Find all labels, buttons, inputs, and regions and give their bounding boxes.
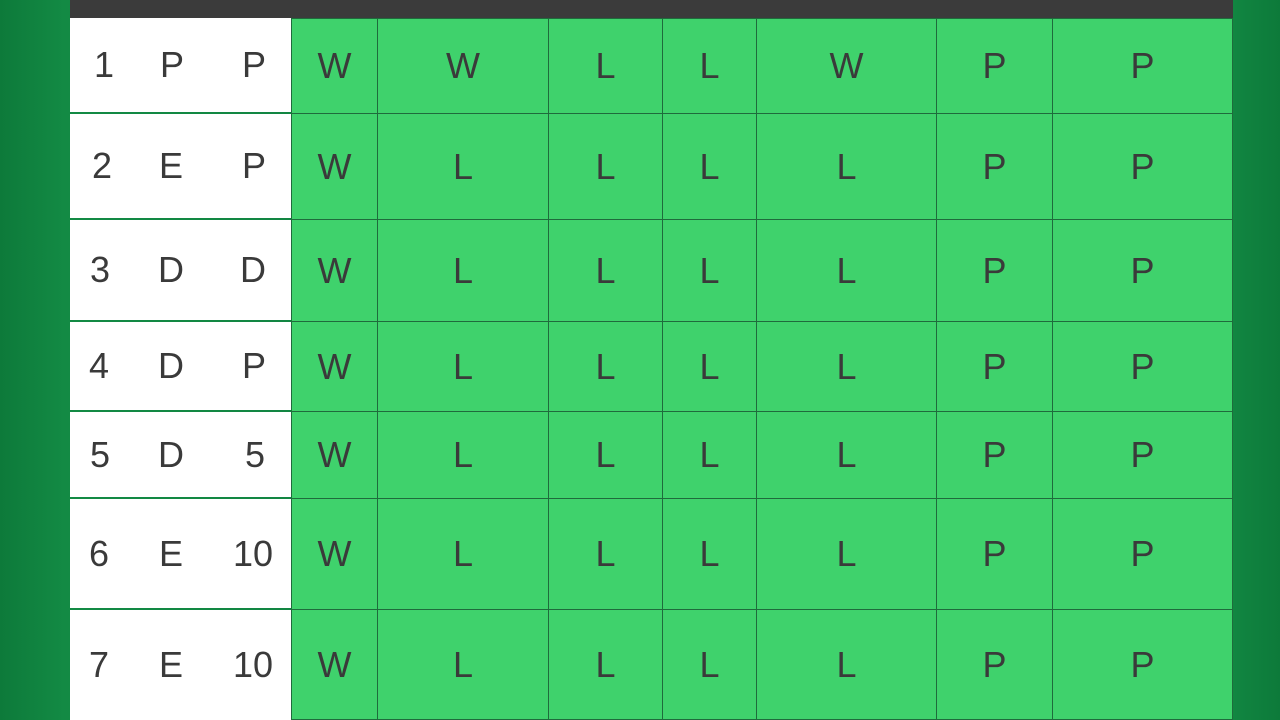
row 1: 1 — [94, 44, 114, 85]
row 5: 5 — [90, 434, 110, 474]
table: P — [982, 644, 1006, 684]
row 4 — [70, 322, 291, 410]
table: P — [982, 434, 1006, 475]
table: L — [836, 146, 857, 186]
row 1 — [70, 18, 291, 112]
row 7 — [70, 610, 291, 720]
table: L — [453, 434, 473, 475]
row 3: D — [240, 249, 266, 290]
table: P — [982, 146, 1006, 186]
row 1: P — [242, 44, 266, 85]
row 5: 5 — [245, 434, 265, 474]
table: P — [982, 250, 1006, 290]
table: L — [453, 146, 473, 186]
table: P — [1130, 250, 1154, 290]
row 6: 6 — [89, 532, 109, 574]
table: P — [982, 45, 1006, 86]
table: P — [1130, 45, 1154, 86]
table: L — [595, 250, 616, 290]
table: L — [699, 346, 720, 386]
row 6: E — [159, 532, 183, 574]
table: L — [699, 644, 720, 684]
table: L — [836, 346, 857, 386]
table: L — [453, 250, 473, 290]
row 6 — [70, 499, 291, 608]
row 7: 7 — [89, 644, 109, 685]
table: L — [836, 533, 857, 574]
table: L — [699, 45, 720, 86]
header bar — [70, 0, 1233, 18]
table: L — [595, 346, 616, 386]
table: L — [699, 250, 720, 290]
table: L — [595, 434, 616, 475]
table: W — [318, 250, 351, 290]
row 7: 10 — [233, 644, 273, 685]
row 7: E — [159, 644, 183, 685]
table: L — [595, 146, 616, 186]
row 2: 2 — [92, 145, 112, 186]
row 3: 3 — [90, 249, 110, 290]
table: W — [318, 346, 351, 386]
table: L — [595, 644, 616, 684]
table: L — [699, 434, 720, 475]
table: W — [830, 45, 863, 86]
table: W — [318, 533, 351, 574]
row 5: D — [158, 434, 184, 474]
row 5 — [70, 412, 291, 497]
row 2: P — [242, 145, 266, 186]
row 4: D — [158, 345, 184, 386]
table: L — [453, 644, 473, 684]
table: L — [836, 434, 857, 475]
table: L — [836, 250, 857, 290]
row 4: P — [242, 345, 266, 386]
row 2: E — [159, 145, 183, 186]
table: L — [836, 644, 857, 684]
row 2 — [70, 114, 291, 218]
table: L — [699, 533, 720, 574]
table: W — [446, 45, 480, 86]
table: P — [1130, 644, 1154, 684]
table: P — [982, 346, 1006, 386]
row 3: D — [158, 249, 184, 290]
row 3 — [70, 220, 291, 320]
green cells — [291, 18, 1233, 720]
table: W — [318, 644, 351, 684]
table: L — [453, 346, 473, 386]
row 6: 10 — [233, 532, 273, 574]
table: L — [595, 45, 616, 86]
row 1: P — [160, 44, 184, 85]
table: P — [1130, 346, 1154, 386]
table: P — [982, 533, 1006, 574]
table: P — [1130, 533, 1154, 574]
table: L — [699, 146, 720, 186]
table: L — [453, 533, 473, 574]
row 4: 4 — [89, 345, 109, 386]
table: W — [318, 434, 351, 475]
table: L — [595, 533, 616, 574]
table: P — [1130, 146, 1154, 186]
table: W — [318, 45, 351, 86]
table: P — [1130, 434, 1154, 475]
table: W — [318, 146, 351, 186]
